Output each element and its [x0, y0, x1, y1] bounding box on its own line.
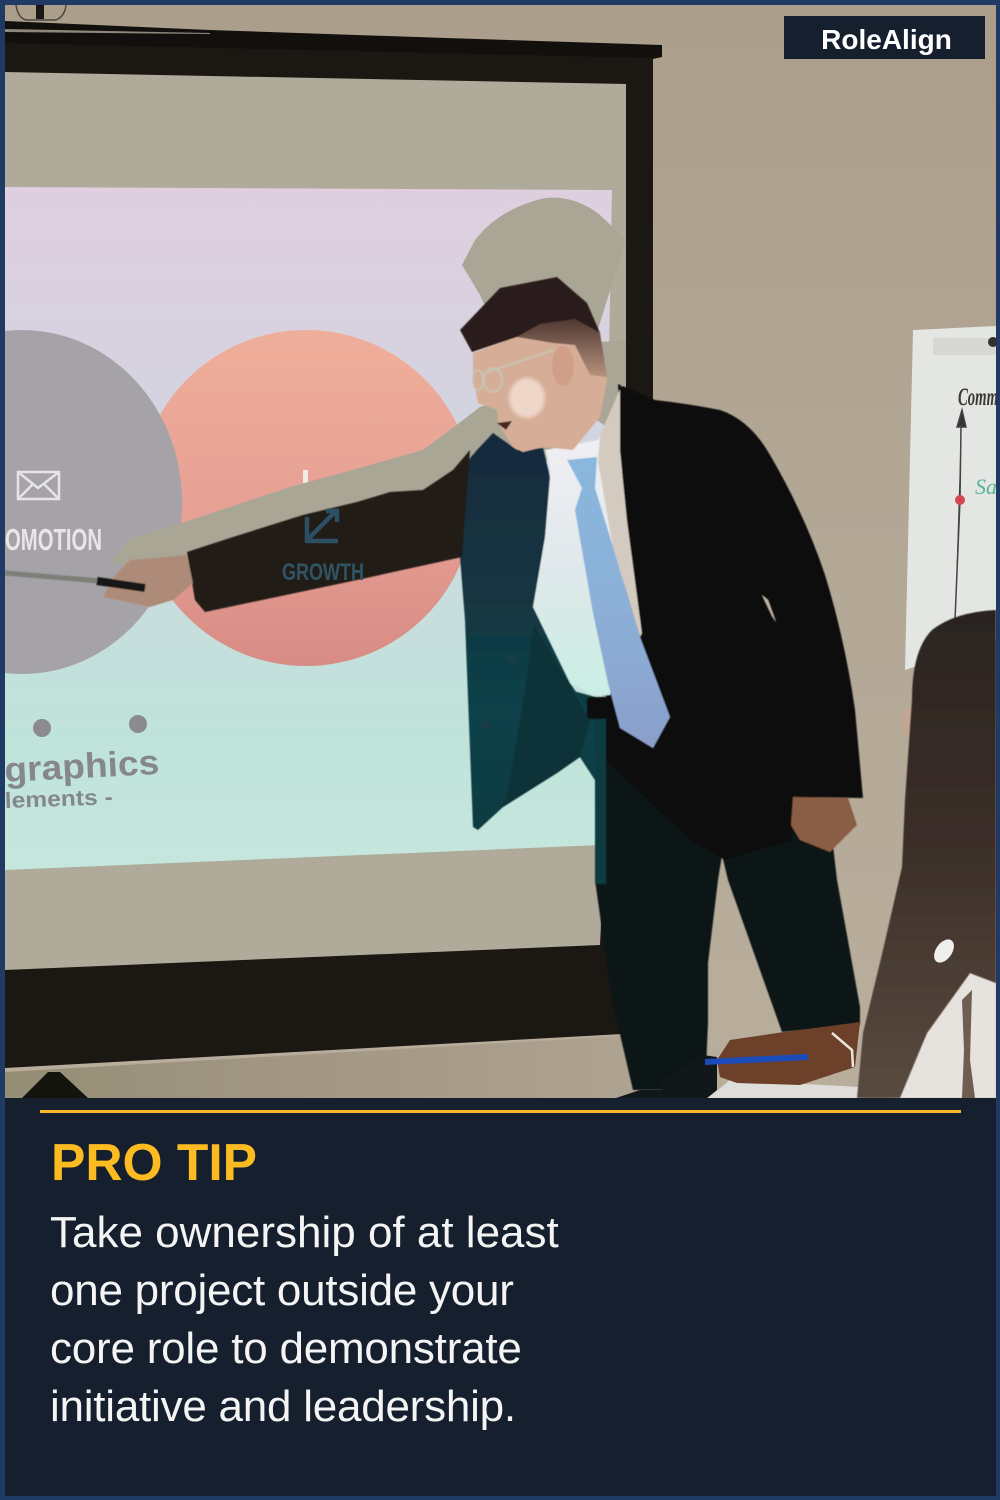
board tray [933, 338, 996, 355]
rail highlight gap [5, 29, 210, 34]
student white shirt [895, 973, 996, 1098]
slide white tick [303, 470, 308, 483]
student hair [857, 610, 996, 1098]
jacket front, tinted by projector [460, 433, 595, 830]
slide label promotion: OMOTION [5, 522, 102, 557]
brand badge: RoleAlign [821, 24, 952, 55]
presenter shadow on screen [110, 198, 626, 575]
heading: PRO TIP [51, 1133, 257, 1191]
jacket buttons [482, 654, 515, 730]
panel: pro tip [5, 1098, 996, 1496]
screen surface [5, 72, 626, 970]
jacket body [606, 384, 863, 860]
tip text: one project outside your [50, 1266, 514, 1315]
coral circle [138, 330, 474, 666]
tip text: core role to demonstrate [50, 1324, 522, 1373]
trousers [595, 700, 860, 1090]
ear [552, 346, 574, 386]
envelope icon [18, 472, 59, 499]
notebook [708, 1080, 860, 1098]
board red dot [955, 495, 965, 505]
glasses [473, 350, 553, 392]
wristband [832, 1033, 853, 1067]
hair strand on shirt [962, 990, 975, 1098]
student ear [902, 707, 914, 737]
hair fade [517, 318, 607, 377]
slide text graphics: graphics [5, 743, 160, 790]
belt [587, 697, 613, 719]
teal trouser strip [570, 690, 606, 884]
growth text on sleeve: GROWTH [282, 559, 364, 586]
hair tie [930, 936, 958, 966]
grey circle [0, 330, 182, 674]
cheek highlight [509, 378, 545, 418]
screen black frame [5, 43, 653, 1068]
mouth [497, 421, 512, 430]
hair [460, 277, 600, 352]
screen roller rail [5, 21, 662, 59]
tripod base [22, 1072, 88, 1098]
hand holding pointer [103, 555, 193, 607]
pointer stick [5, 573, 100, 581]
pen [705, 1057, 808, 1062]
tie [567, 457, 670, 748]
board knob [988, 337, 998, 347]
collar and beige shirt band [598, 385, 642, 637]
student forearm [717, 1022, 860, 1085]
right hand [791, 797, 857, 852]
inner arm gap [762, 595, 776, 622]
slide text elements: lements - [5, 784, 113, 813]
ceiling mount lamp [16, 5, 66, 20]
accent rule [40, 1110, 961, 1113]
wall background [5, 5, 996, 1098]
board arrow [955, 410, 966, 620]
sleeve arm [187, 450, 470, 612]
slide projection [5, 187, 612, 870]
foreground student [616, 610, 996, 1098]
whiteboard [905, 326, 998, 670]
neck and face [473, 335, 607, 452]
shirt [533, 385, 625, 695]
projection screen [0, 21, 662, 1068]
floor strip [5, 1035, 700, 1098]
jacket lapel [620, 385, 663, 633]
board surface [905, 326, 996, 670]
photo: presenter at projection screen [5, 5, 996, 1098]
growth chart icon [307, 510, 338, 541]
brand badge [784, 16, 985, 59]
tip text: initiative and leadership. [50, 1382, 516, 1431]
jacket lining [503, 625, 590, 807]
dark sleeve [616, 1055, 717, 1098]
tip text: Take ownership of at least [50, 1208, 559, 1257]
slide dots [33, 715, 147, 737]
presenter [5, 277, 863, 1090]
tip text [50, 1208, 559, 1431]
